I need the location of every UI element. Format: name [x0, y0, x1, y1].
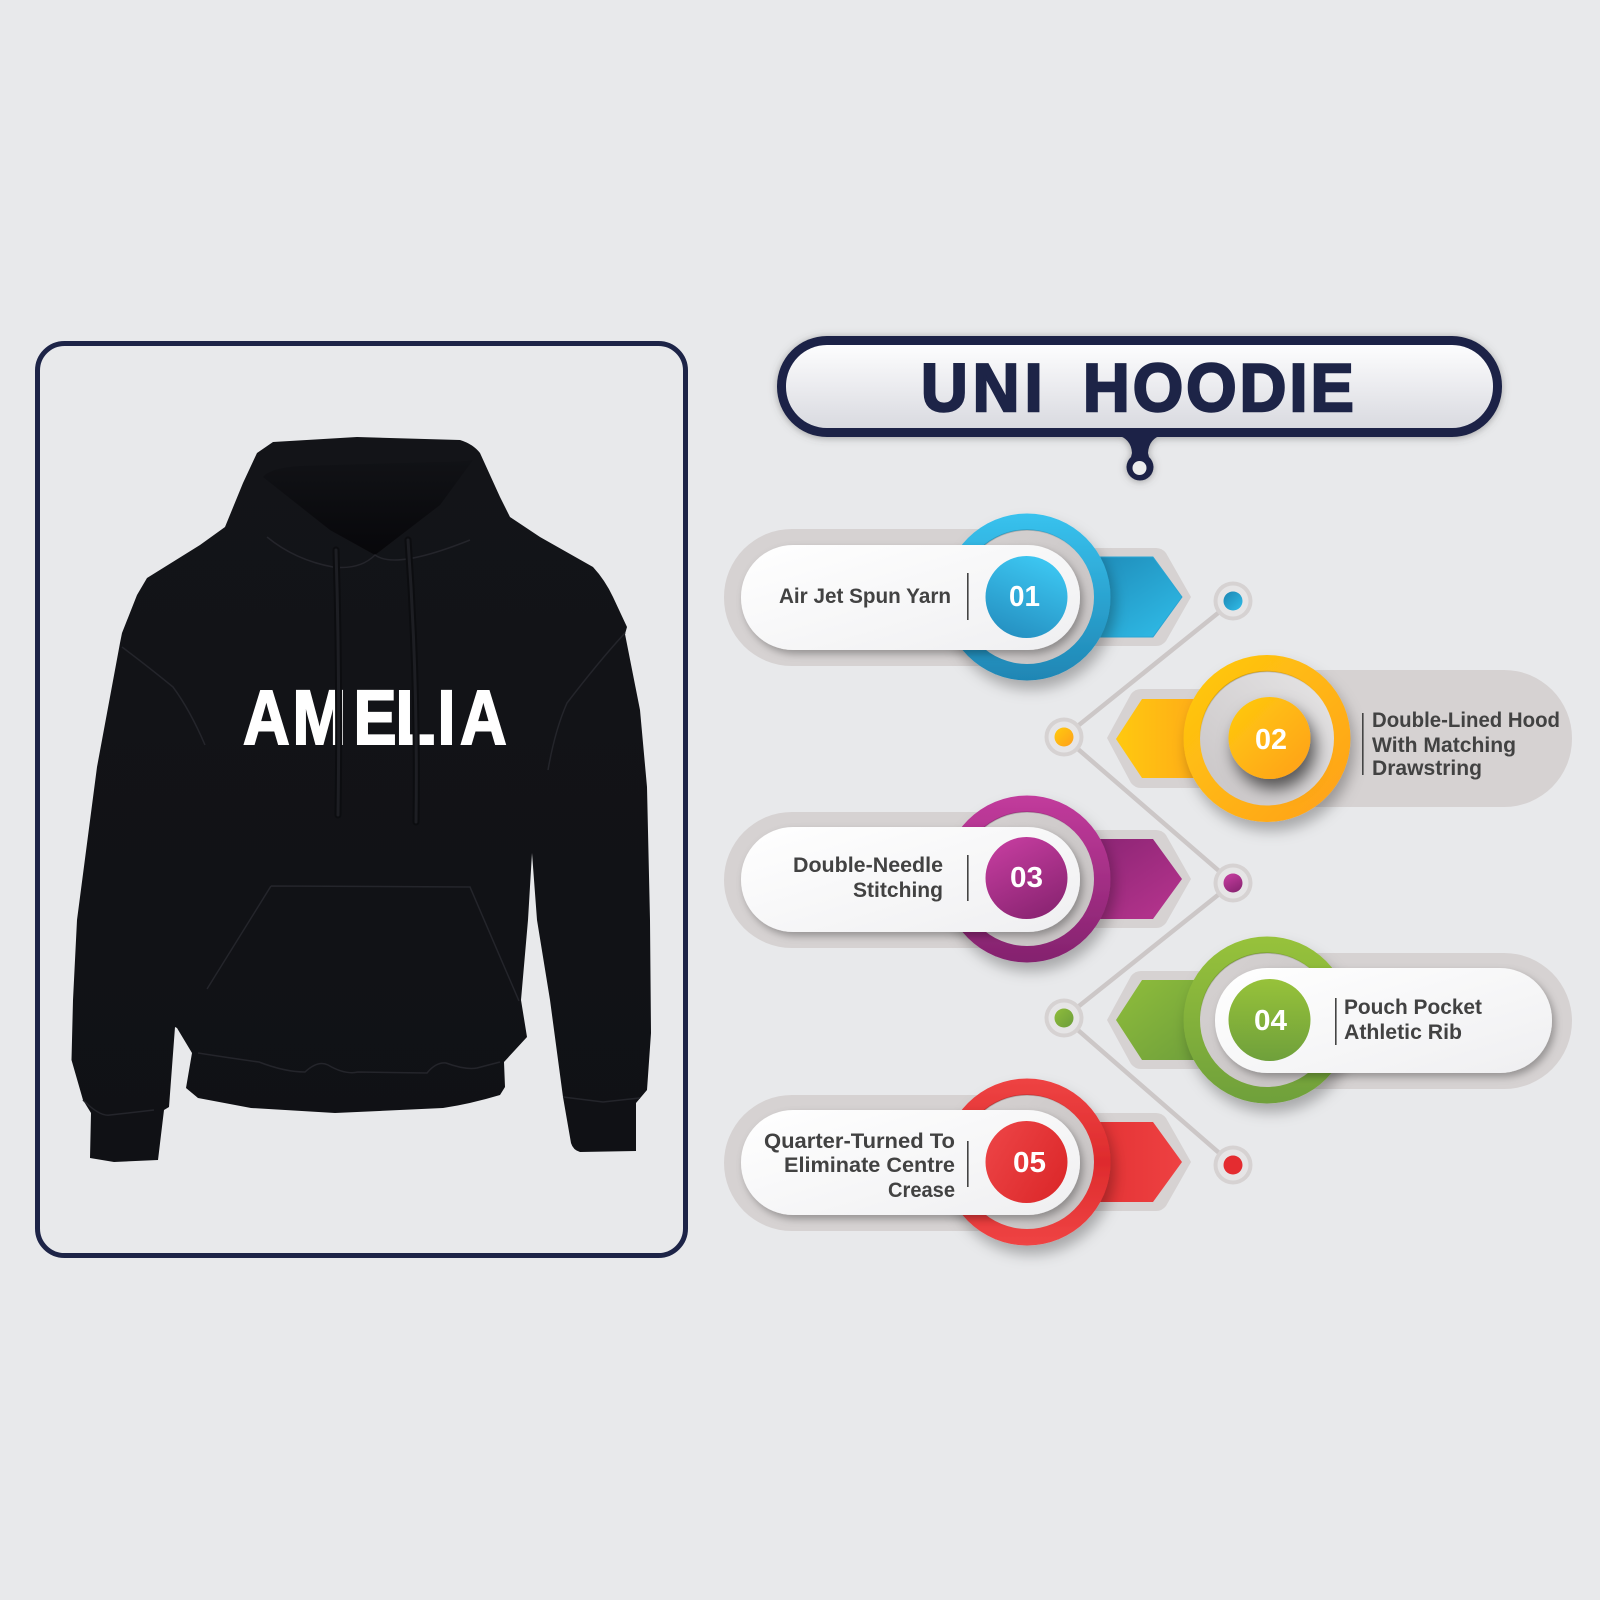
label 03: Double-Needle [793, 853, 943, 877]
number badge 03 [986, 837, 1068, 919]
label 05: Crease [888, 1178, 955, 1202]
hood opening [263, 460, 473, 555]
connector lines [1064, 601, 1233, 1165]
title text: HOODIE [1083, 351, 1354, 426]
label 02: Drawstring [1372, 756, 1482, 780]
label 05 [764, 1129, 955, 1202]
card 01: Air Jet Spun Yarn: 01 [1009, 581, 1040, 613]
drawstrings [336, 540, 416, 822]
card 01: Air Jet Spun Yarn [724, 514, 1191, 680]
card 02: Double-Lined Hood: 02 [1255, 724, 1287, 756]
title text [921, 351, 1354, 426]
node 3 [1214, 864, 1252, 902]
node 4 [1044, 998, 1084, 1038]
hoodie illustration [72, 437, 651, 1162]
number badge 01 [986, 556, 1068, 638]
label 03: Stitching [853, 878, 943, 902]
seams and pocket [83, 537, 640, 1115]
label 02 [1372, 708, 1560, 780]
label 04 [1344, 995, 1482, 1044]
number badge 04 [1228, 979, 1310, 1061]
label 02: With Matching [1372, 733, 1516, 757]
card 02: Double-Lined Hood [1107, 655, 1572, 822]
label 05: Eliminate Centre [784, 1153, 955, 1177]
card 03: Double-Needle Stitching [724, 796, 1191, 962]
label 05: Quarter-Turned To [764, 1129, 955, 1153]
label 02: Double-Lined Hood [1372, 708, 1560, 732]
node 5 [1214, 1146, 1252, 1184]
label 01: Air Jet Spun Yarn [779, 584, 951, 608]
number badge 05 [986, 1121, 1068, 1203]
card 04: Pouch Pocket Athletic Rib [1107, 936, 1572, 1104]
title banner [777, 336, 1502, 481]
label 04: Athletic Rib [1344, 1020, 1462, 1044]
panel: hoodie product frame [38, 344, 686, 1256]
card 05: Quarter-Turned To Eliminate Centre Crease: 05 [1013, 1147, 1046, 1179]
banner pointer [1116, 435, 1163, 481]
card 04: Pouch Pocket Athletic Rib: 04 [1254, 1005, 1287, 1037]
label 03 [793, 853, 943, 902]
number badge 02 [1228, 697, 1310, 779]
printed name: AMELIA [243, 676, 507, 761]
node 1 [1214, 582, 1252, 620]
banner pill [777, 336, 1502, 437]
label 04: Pouch Pocket [1344, 995, 1482, 1019]
title text: UNI [921, 351, 1043, 426]
node 2 [1044, 718, 1084, 756]
card 03: Double-Needle Stitching: 03 [1010, 862, 1043, 894]
card 05: Quarter-Turned To Eliminate Centre Crease [724, 1078, 1191, 1246]
